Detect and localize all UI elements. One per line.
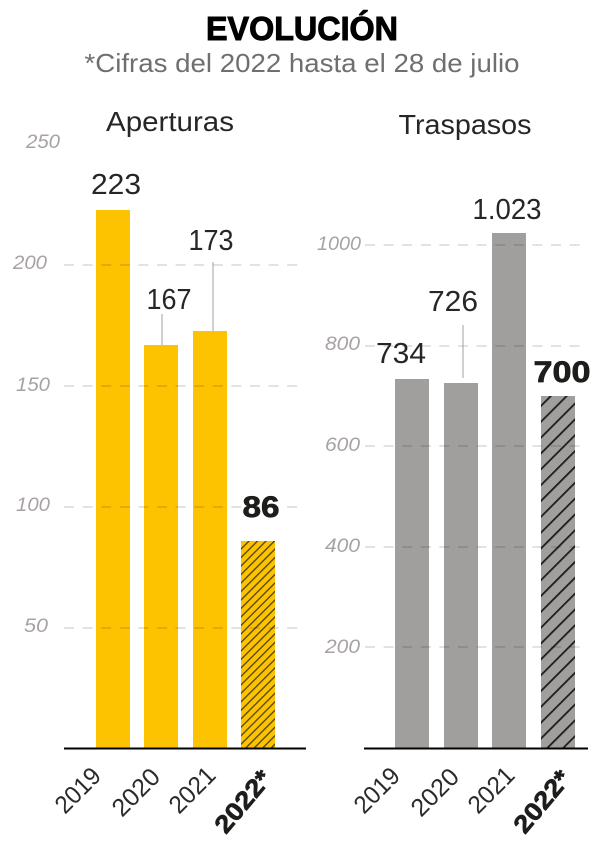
year labels: traspasos: 2020	[405, 763, 465, 822]
year labels: traspasos: 2021	[462, 761, 520, 819]
year labels: aperturas: 2022*	[209, 765, 278, 839]
value labels: aperturas	[91, 169, 280, 524]
value labels: traspasos: 734	[376, 338, 426, 370]
value labels: traspasos: 1.023	[472, 194, 542, 226]
value labels: traspasos: 726	[428, 286, 478, 318]
value labels: aperturas: 167	[146, 284, 192, 316]
y axis labels: aperturas: 100	[16, 495, 50, 516]
year labels: aperturas: 2020	[106, 763, 166, 822]
subtitle: *Cifras del 2022 hasta el 28 de julio	[84, 48, 520, 78]
y axis labels: aperturas: 150	[16, 375, 50, 396]
y axis labels: traspasos	[317, 234, 361, 658]
value labels: aperturas: 173	[188, 225, 234, 257]
y axis labels: traspasos: 600	[325, 435, 360, 456]
y axis labels: aperturas: 200	[12, 253, 47, 274]
heading: aperturas: Aperturas	[106, 106, 234, 137]
panel: aperturas chart	[12, 106, 306, 839]
y axis labels: aperturas: 250	[25, 132, 60, 153]
year labels: traspasos	[348, 761, 577, 839]
year labels: aperturas	[49, 761, 278, 839]
heading: traspasos: Traspasos	[398, 109, 532, 140]
value labels: traspasos	[376, 194, 590, 389]
y axis labels: aperturas	[12, 132, 60, 637]
value labels: traspasos: 700	[534, 356, 590, 389]
title: EVOLUCIÓN	[206, 10, 398, 47]
year labels: aperturas: 2019	[49, 762, 107, 819]
x axis: aperturas	[64, 748, 306, 750]
y axis labels: traspasos: 400	[325, 536, 360, 557]
y axis labels: aperturas: 50	[24, 616, 48, 637]
value labels: aperturas: 86	[242, 491, 280, 524]
y axis labels: traspasos: 800	[325, 334, 360, 355]
value labels: aperturas: 223	[91, 169, 141, 201]
year labels: traspasos: 2022*	[508, 765, 577, 839]
year labels: aperturas: 2021	[163, 761, 221, 819]
bars: aperturas	[96, 210, 275, 748]
bars: traspasos	[395, 233, 575, 748]
y axis labels: traspasos: 200	[324, 637, 360, 658]
y axis labels: traspasos: 1000	[317, 234, 361, 255]
x axis: traspasos	[364, 748, 588, 750]
year labels: traspasos: 2019	[348, 762, 406, 819]
panel: traspasos chart	[317, 109, 590, 839]
